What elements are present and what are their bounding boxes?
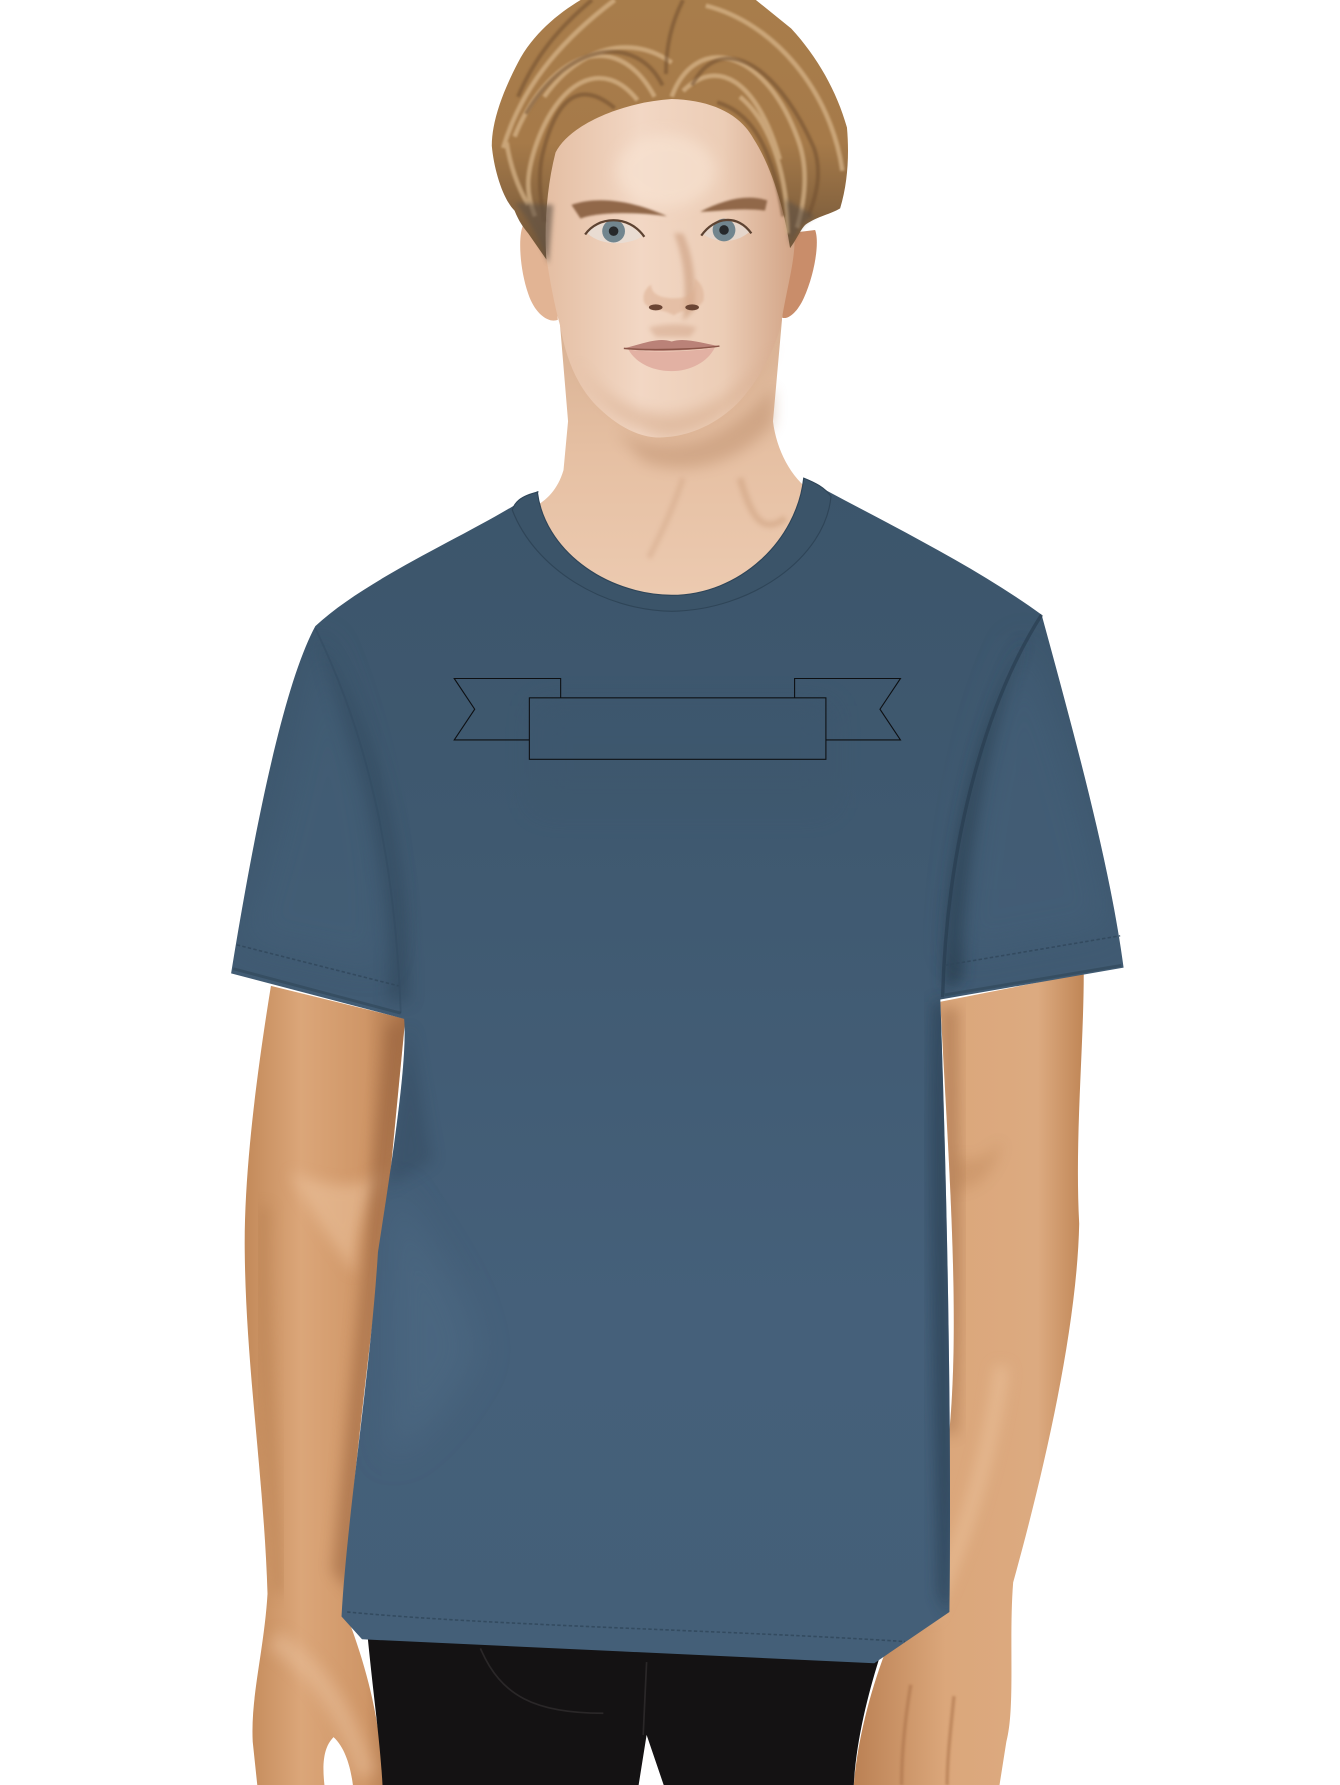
- face: [537, 68, 795, 438]
- nose: [643, 279, 704, 315]
- ribbon banner outline: [454, 678, 900, 759]
- ears: [520, 222, 817, 321]
- ribbon left tail: [454, 678, 561, 740]
- T-shirt: [231, 478, 1124, 1663]
- ribbon right tail: [795, 678, 900, 740]
- left arm and hand: [245, 986, 405, 1785]
- left eyebrow: [571, 200, 667, 219]
- illustration: man wearing a slate blue T-shirt: [231, 0, 1124, 1785]
- hair mass: [492, 0, 848, 260]
- shirt body and sleeves: [231, 478, 1124, 1663]
- black trousers: [368, 1637, 879, 1785]
- cheek and jaw shading: [575, 342, 778, 437]
- crew neck collar: [512, 478, 831, 611]
- left eye: [585, 220, 644, 243]
- head shape: [537, 68, 795, 438]
- sleeve hem stitching: [237, 936, 1120, 986]
- right eye: [701, 219, 751, 241]
- hair highlights: [503, 0, 842, 233]
- mouth: [624, 340, 719, 371]
- neck: [533, 319, 812, 595]
- right eyebrow: [700, 198, 767, 212]
- sideburn shadow: [515, 199, 815, 264]
- right arm and hand: [854, 973, 1084, 1785]
- bottom hem stitching: [347, 1612, 905, 1642]
- hair: [492, 0, 848, 264]
- ribbon centre panel: [529, 698, 826, 759]
- hair shadows: [518, 0, 818, 222]
- sleeve seams: [315, 628, 401, 1013]
- fold shadows: [360, 614, 1120, 1607]
